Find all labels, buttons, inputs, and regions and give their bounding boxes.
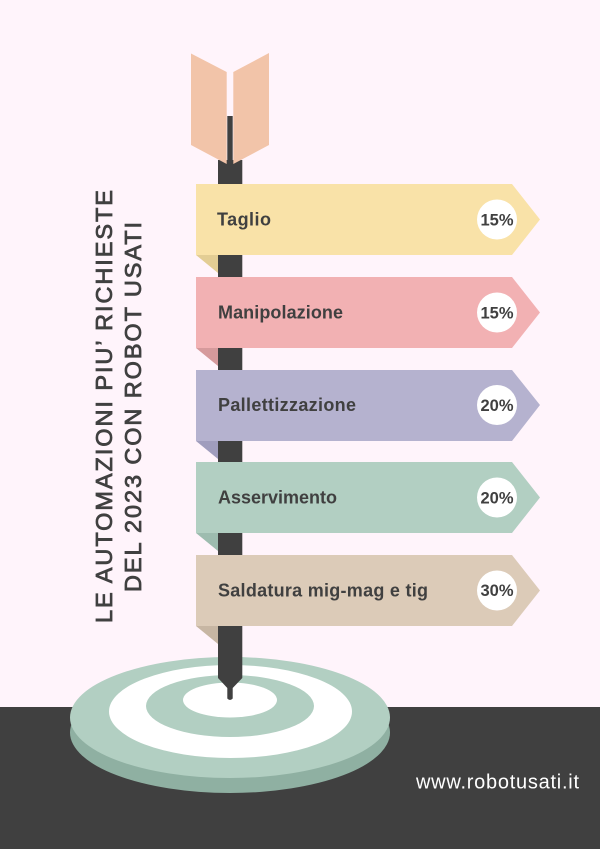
arrow feathers	[191, 53, 269, 164]
banner: Pallettizzazione 20%	[196, 370, 540, 459]
banner: Taglio 15%: 15%	[480, 212, 514, 230]
banner: Manipolazione 15%: Manipolazione	[218, 302, 343, 322]
banner: Pallettizzazione 20%: 20%	[480, 397, 514, 415]
vertical title: DEL 2023 CON ROBOT USATI	[120, 222, 146, 592]
banner: Saldatura mig-mag e tig 30%	[196, 555, 540, 644]
dark ground band	[0, 707, 600, 849]
banner: Saldatura mig-mag e tig 30%: Saldatura mig-mag e tig	[218, 580, 428, 600]
website url: www.robotusati.it	[415, 772, 579, 794]
banner: Manipolazione 15%: 15%	[480, 304, 514, 322]
vertical title	[91, 190, 146, 623]
banner: Asservimento 20%: 20%	[480, 490, 514, 508]
vertical title: LE AUTOMAZIONI PIU’ RICHIESTE	[91, 190, 117, 623]
banner: Taglio 15%	[196, 184, 540, 273]
banner: Asservimento 20%: Asservimento	[218, 488, 337, 508]
banner: Manipolazione 15%	[196, 277, 540, 366]
target	[70, 657, 390, 793]
banner: Pallettizzazione 20%: Pallettizzazione	[218, 395, 356, 415]
banner: Asservimento 20%	[196, 462, 540, 551]
arrow shaft and tip	[218, 116, 242, 700]
banner: Saldatura mig-mag e tig 30%: 30%	[480, 582, 514, 600]
banner: Taglio 15%: Taglio	[217, 210, 271, 230]
